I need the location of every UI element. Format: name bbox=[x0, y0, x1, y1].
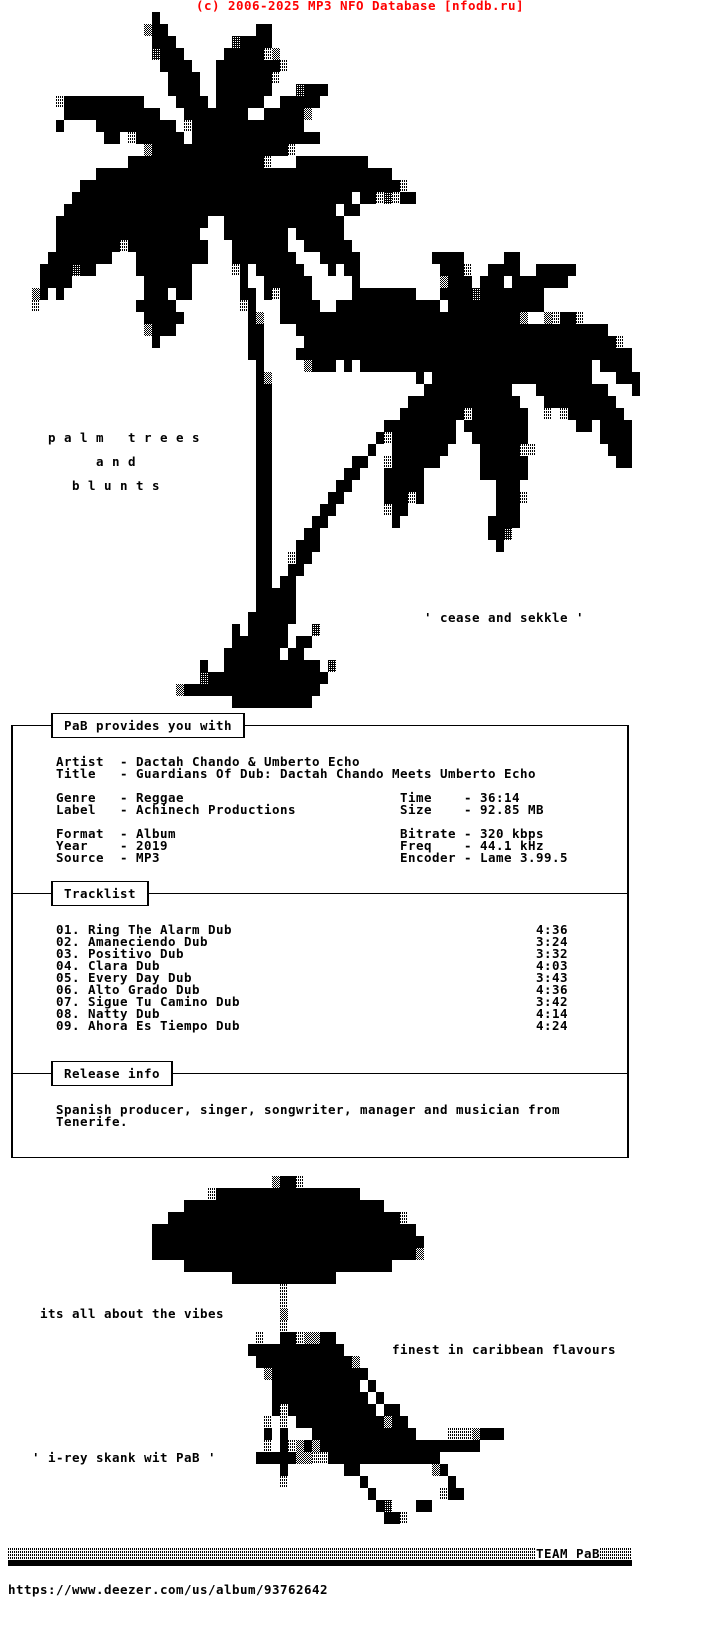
text block: release description: Spanish producer, singer, songwriter, manager and musician from Tenerife. bbox=[56, 1102, 560, 1129]
text block: track names: 01. Ring The Alarm Dub 02. Amaneciendo Dub 03. Positivo Dub 04. Clara Dub 05. Every Day Dub 06. Alto Grado Dub 07. Sigue Tu Camino Dub 08. Natty Dub 09. Ahora Es Tiempo Dub bbox=[56, 922, 240, 1033]
text block: track durations: 4:36 3:24 3:32 4:03 3:43 4:36 3:42 4:14 4:24 bbox=[536, 922, 568, 1033]
footer label: TEAM PaB: TEAM PaB bbox=[536, 1546, 600, 1561]
footer link text: https://www.deezer.com/us/album/93762642 bbox=[8, 1582, 328, 1597]
section heading: Tracklist bbox=[51, 881, 149, 906]
section heading: PaB provides you with bbox=[51, 713, 245, 738]
section heading: PaB provides you with: PaB provides you with bbox=[64, 718, 232, 733]
section heading: Tracklist: Tracklist bbox=[64, 886, 136, 901]
illustration: right palm crown bbox=[280, 258, 640, 546]
illustration: left palm crown bbox=[32, 18, 416, 354]
caption: i-rey skank wit PaB: ' i-rey skank wit PaB ' bbox=[32, 1450, 216, 1465]
section heading: Release info: Release info bbox=[64, 1066, 160, 1081]
text block: release metadata left column: Artist - Dactah Chando & Umberto Echo Title - Guardians Of Dub: Dactah Chando Meets Umberto Echo Genre - Reggae Label - Achinech Productions Format - Album Year - 2019 Source - MP3 bbox=[56, 754, 536, 865]
panel: release details bbox=[11, 725, 629, 1158]
section heading: Release info bbox=[51, 1061, 173, 1086]
caption: palm trees and blunts: p a l m t r e e s a n d b l u n t s bbox=[48, 430, 200, 493]
illustration: beach umbrella bbox=[152, 1176, 424, 1332]
illustration: palm trunks and ground bbox=[176, 366, 336, 702]
text block: release metadata right column: Time - 36:14 Size - 92.85 MB Bitrate - 320 kbps Freq - 44.1 kHz Encoder - Lame 3.99.5 bbox=[400, 790, 568, 865]
caption: finest in caribbean flavours: finest in caribbean flavours bbox=[392, 1342, 616, 1357]
caption: cease and sekkle: ' cease and sekkle ' bbox=[424, 610, 584, 625]
caption: its all about the vibes: its all about the vibes bbox=[40, 1306, 224, 1321]
illustration: deck chair bbox=[248, 1332, 504, 1524]
footer bar bbox=[8, 1548, 632, 1566]
